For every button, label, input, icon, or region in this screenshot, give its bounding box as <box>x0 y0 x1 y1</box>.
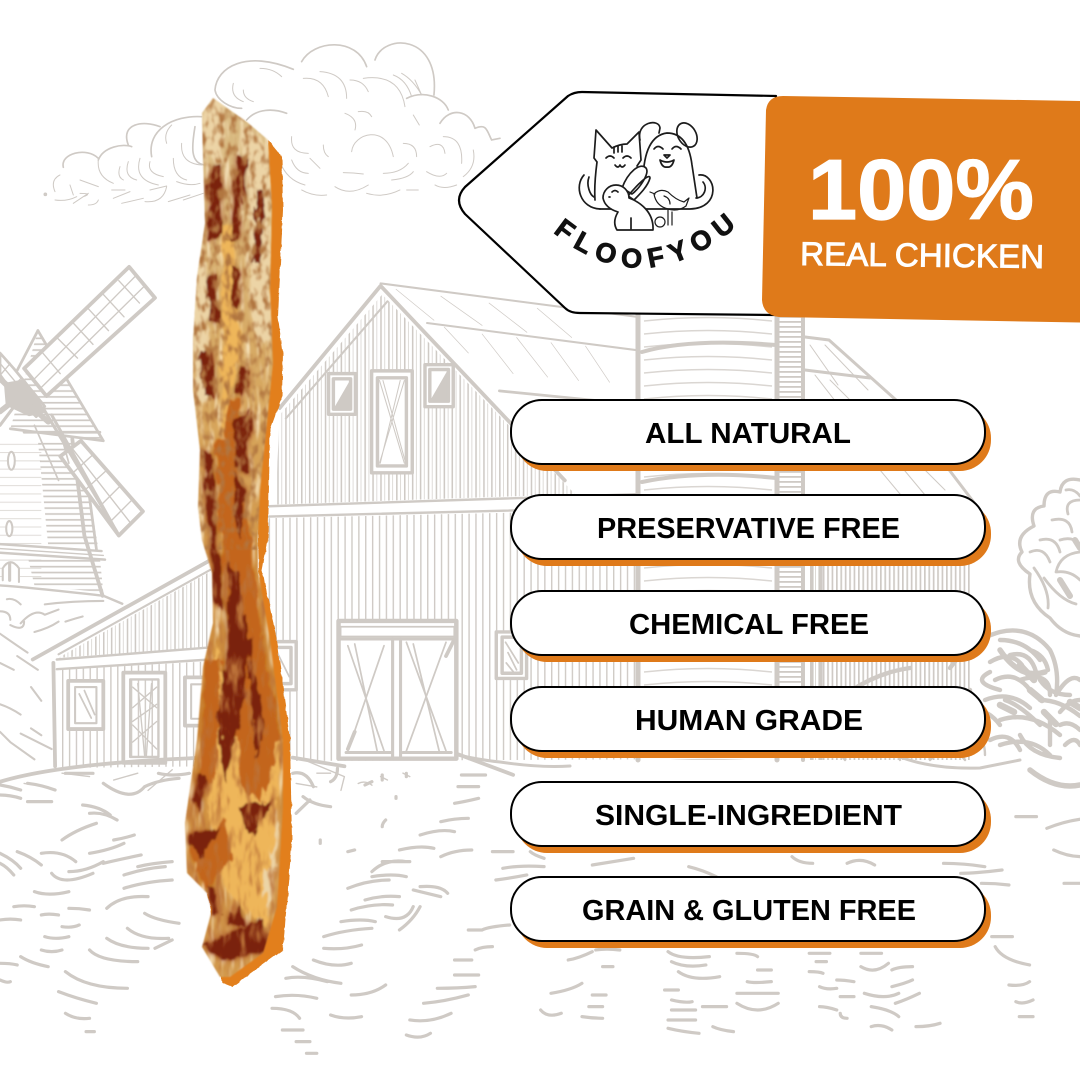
silo <box>638 315 803 760</box>
pill: chemical free <box>511 591 991 662</box>
100%: 100% <box>808 143 1034 238</box>
icon: cat <box>579 130 641 209</box>
bushes right <box>820 630 1080 786</box>
windmill <box>0 267 155 604</box>
jerky streaks <box>190 90 282 960</box>
pill: human grade: HUMAN GRADE <box>635 705 863 737</box>
benefits pill list <box>511 400 991 948</box>
orange backing shape <box>207 140 292 987</box>
window: behind jerky <box>262 642 296 690</box>
pill: preservative free: PRESERVATIVE FREE <box>597 513 900 545</box>
icon: rabbit <box>603 166 653 230</box>
pill: single-ingredient <box>511 782 991 853</box>
door: hay loft <box>372 371 412 473</box>
pill: human grade <box>511 687 991 758</box>
REAL CHICKEN: REAL CHICKEN <box>800 235 1044 275</box>
field furrows <box>0 768 1080 1053</box>
windmill windows and door <box>3 452 19 582</box>
pill: all natural <box>511 400 991 471</box>
FLOOFYOU logo illustration <box>579 119 713 230</box>
tree right <box>1018 479 1080 636</box>
ground line right <box>458 748 1020 768</box>
window: right of doors <box>496 632 527 678</box>
logo tag: white pentagon arrow <box>458 90 778 316</box>
pill: grain and gluten free: GRAIN & GLUTEN FREE <box>582 895 916 927</box>
window: right gable <box>425 365 453 407</box>
badge: 100% real chicken <box>762 96 1080 322</box>
product: chicken jerky twist <box>180 90 292 990</box>
icon: bird <box>650 190 689 227</box>
FLOOFYOU wordmark: FLOOFYOU <box>554 212 734 268</box>
pill: all natural: ALL NATURAL <box>645 418 851 450</box>
pill: chemical free: CHEMICAL FREE <box>629 609 869 641</box>
pill: single-ingredient: SINGLE-INGREDIENT <box>595 800 902 832</box>
jerky body <box>184 97 284 978</box>
right barn <box>803 337 985 760</box>
side shed <box>33 560 212 768</box>
left cloud <box>44 117 205 205</box>
pill: grain and gluten free <box>511 877 991 948</box>
large cloud <box>215 43 500 195</box>
main barn <box>33 283 639 768</box>
window: left gable <box>329 374 355 414</box>
icon: dog <box>600 119 713 209</box>
barn double doors <box>339 621 456 759</box>
hillside strokes <box>0 599 513 790</box>
pill: preservative free <box>511 495 991 566</box>
windmill blades <box>0 267 155 536</box>
